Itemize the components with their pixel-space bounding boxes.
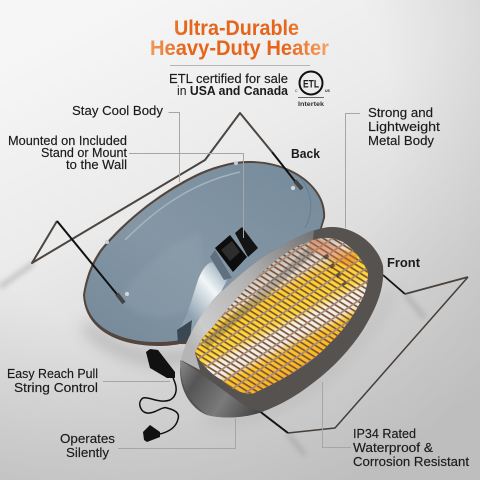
end cap — [180, 360, 262, 417]
callout line: stay cool body — [168, 112, 180, 182]
screws — [234, 161, 238, 165]
certification text — [169, 72, 289, 98]
shell highlights — [125, 172, 240, 240]
label: mounted on stand: Stand or Mount — [41, 146, 128, 160]
back stand brackets — [57, 152, 302, 303]
shadows — [0, 263, 425, 455]
front of heater — [180, 225, 383, 417]
front stand wire — [258, 275, 468, 433]
mounting bracket — [210, 227, 258, 280]
label: mounted on stand: to the Wall — [66, 158, 127, 172]
icon: ETL Intertek logo: US — [325, 89, 331, 93]
title: Ultra-Durable — [174, 17, 299, 40]
heating grille — [195, 238, 368, 394]
icon: ETL Intertek logo: C — [295, 89, 298, 93]
icon: ETL Intertek logo — [295, 72, 331, 108]
label: easy reach — [7, 367, 98, 395]
label: IP34: IP34 Rated — [353, 427, 416, 441]
callout line: operates silently — [118, 417, 236, 448]
label: IP34: Corrosion Resistant — [353, 455, 470, 469]
label: operates silently: Operates — [60, 432, 115, 446]
label: easy reach: Easy Reach Pull — [7, 367, 98, 381]
header rule — [170, 64, 310, 66]
label: strong and lightweight: Strong and — [368, 106, 433, 120]
label: operates silently: Silently — [66, 446, 110, 460]
label: strong and lightweight: Lightweight — [368, 120, 441, 134]
label: front: Front — [387, 256, 421, 270]
label: operates silently — [60, 432, 115, 460]
back stand wire — [32, 113, 272, 263]
callout line: mounted on stand — [129, 154, 244, 238]
icon: ETL Intertek logo: Intertek — [298, 101, 324, 108]
label: back: Back — [291, 147, 320, 161]
label: mounted on stand: Mounted on Included — [8, 134, 127, 148]
label: IP34 — [353, 427, 470, 469]
label: mounted on stand — [8, 134, 128, 172]
label: IP34: Waterproof & — [353, 441, 434, 455]
back shell of heater — [83, 161, 325, 346]
certification text: ETL certified for sale — [169, 72, 288, 86]
certification text: in USA and Canada — [177, 84, 289, 98]
callout line: easy reach — [103, 380, 170, 382]
label: easy reach: String Control — [14, 381, 98, 395]
label: strong and lightweight: Metal Body — [368, 134, 435, 148]
silver band — [181, 230, 314, 370]
label: stay cool body: Stay Cool Body — [72, 104, 164, 118]
icon: ETL Intertek logo: ETL — [303, 78, 319, 90]
title — [150, 17, 329, 60]
callout line: IP34 — [322, 382, 351, 448]
label: strong and lightweight — [368, 106, 441, 148]
callout line: strong and lightweight — [346, 114, 360, 228]
pull string control — [140, 349, 178, 442]
title: Heavy-Duty Heater — [150, 37, 329, 60]
chrome reflection — [178, 262, 228, 342]
